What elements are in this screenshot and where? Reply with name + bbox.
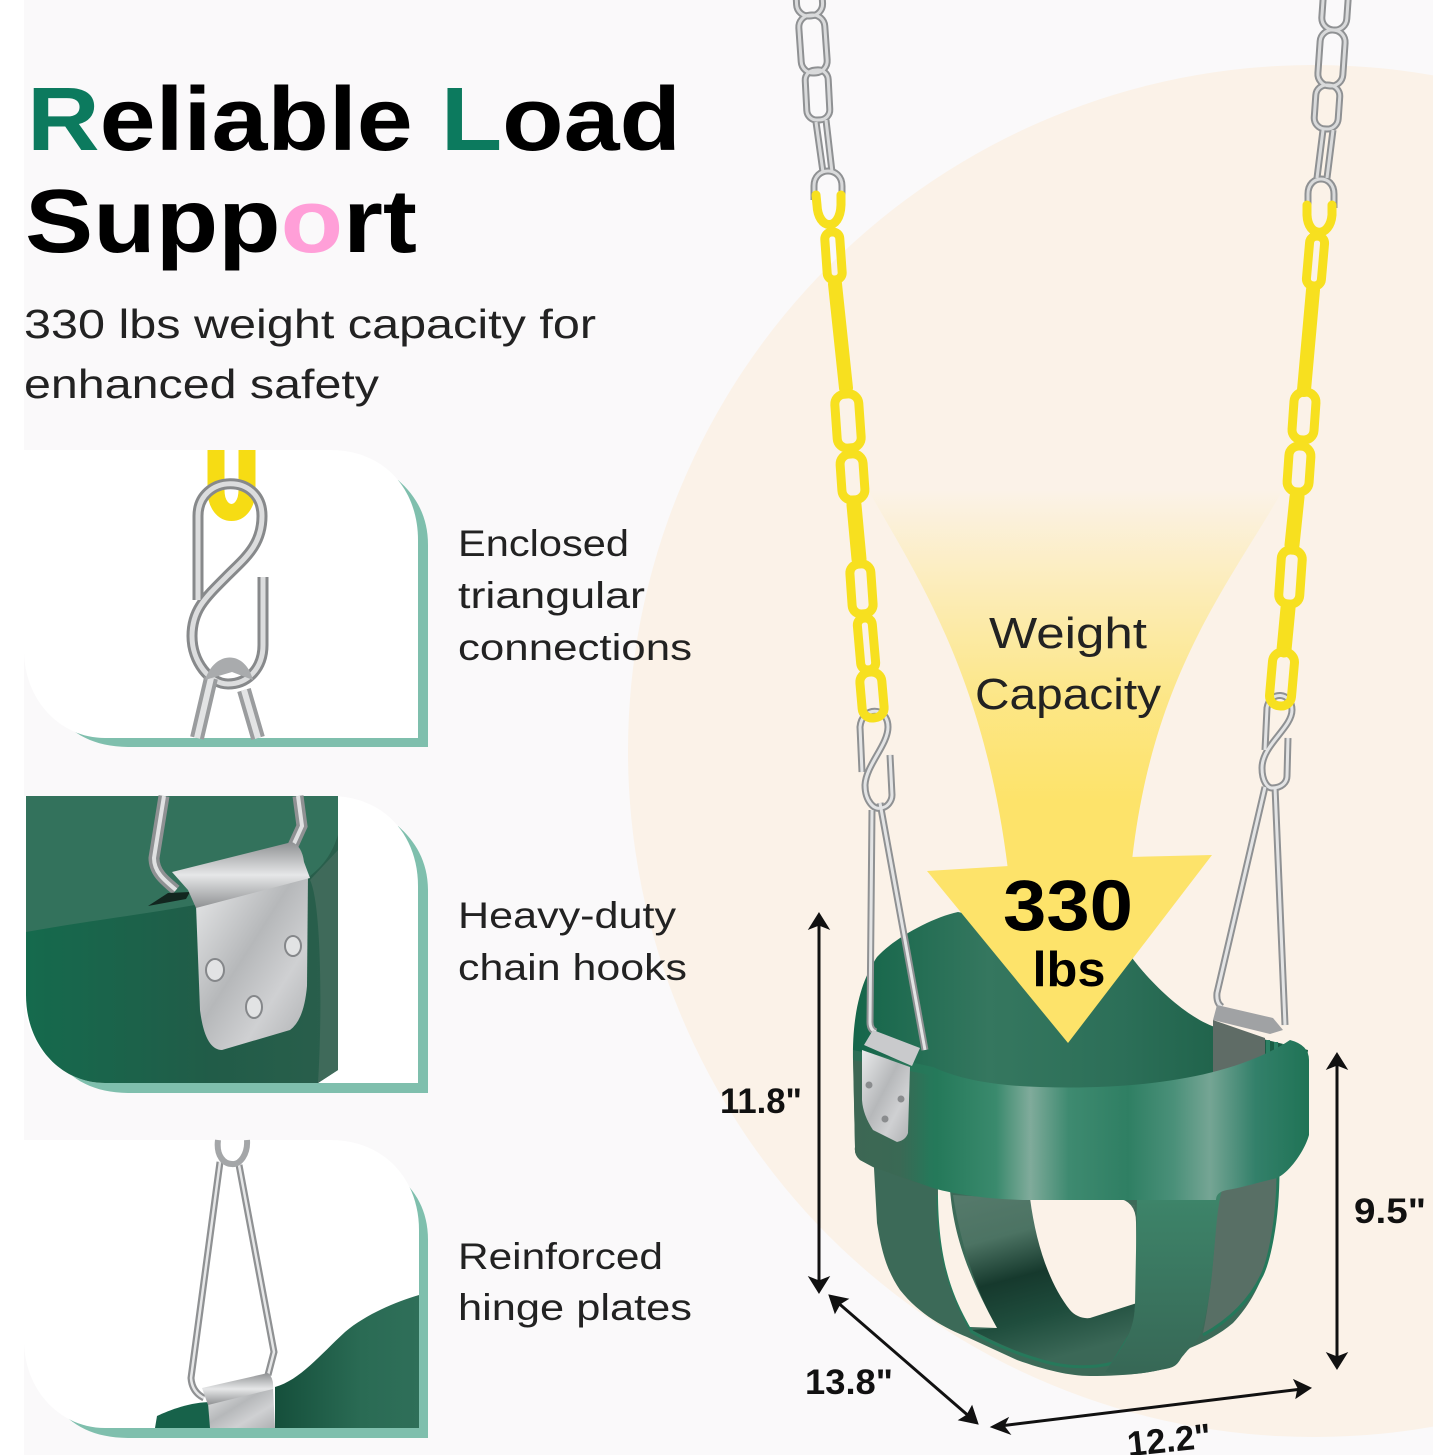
weight capacity label: Weight [989, 609, 1147, 658]
right steel chain [1308, 0, 1350, 208]
subtitle: 330 lbs weight capacity for [24, 301, 596, 347]
front band [853, 1040, 1309, 1200]
height arrow 11.8 [809, 913, 829, 1293]
weight arrow head [927, 855, 1212, 1043]
rivets [866, 1082, 904, 1122]
330 lbs label [1003, 867, 1133, 997]
centre strap [1105, 1190, 1222, 1374]
right yellow chain [1269, 205, 1332, 707]
subtitle: enhanced safety [24, 361, 380, 407]
left hinge roll [864, 1030, 920, 1066]
right rim [1203, 1170, 1278, 1335]
text: triangular connections: connections [458, 627, 692, 668]
slit shadow [148, 892, 190, 906]
text: triangular connections [458, 523, 692, 668]
dimension labels [720, 1082, 1426, 1455]
inner rim [938, 1195, 1133, 1367]
left steel chain [795, 0, 842, 200]
panel: hinge plates [24, 1140, 428, 1438]
dimension arrows [809, 913, 1347, 1434]
330 lbs label: lbs [1032, 943, 1106, 997]
subtitle [24, 301, 596, 407]
title line 1: Reliable Load [27, 70, 681, 170]
text: chain hooks: chain hooks [458, 947, 687, 988]
hinge roll [172, 842, 310, 908]
left hinge plate [862, 1050, 910, 1142]
green seat close-up [275, 1295, 419, 1428]
peach background circle [628, 65, 1455, 1437]
left yellow chain [816, 195, 885, 719]
S hook [192, 484, 263, 684]
text: triangular connections: triangular [458, 575, 645, 616]
lower shell [873, 1150, 1278, 1376]
text: hinge plates: hinge plates [458, 1287, 692, 1328]
right hinge [1213, 1005, 1283, 1034]
dimension labels: 11.8" [720, 1082, 802, 1121]
text: hinge plates: Reinforced [458, 1236, 663, 1277]
width arrow 12.2 [991, 1380, 1311, 1434]
triangle wire [191, 1162, 274, 1398]
seat height arrow 9.5 [1327, 1053, 1347, 1369]
depth arrow 13.8 [829, 1295, 978, 1424]
dimension labels: 13.8" [805, 1363, 893, 1402]
330 lbs label: 330 [1003, 867, 1133, 946]
swing seat back rest [853, 912, 1308, 1110]
yellow load beam [868, 490, 1283, 870]
right wire frame [1217, 695, 1292, 1025]
band dark left end [853, 1060, 930, 1188]
side slit [938, 1185, 997, 1328]
title line 2: Supp ort [25, 172, 417, 272]
text: chain hooks [458, 895, 687, 988]
right white margin [1433, 0, 1455, 1455]
yellow chain link [216, 450, 247, 512]
dimension labels: 9.5" [1354, 1192, 1426, 1231]
title [25, 70, 681, 272]
right green rims [1268, 1040, 1284, 1068]
weight capacity label [975, 609, 1161, 719]
panel: triangular connections [24, 450, 428, 747]
hinge roll [202, 1373, 273, 1405]
inner shell [953, 1195, 1135, 1365]
text: triangular connections: Enclosed [458, 523, 629, 564]
rivets [206, 936, 301, 1018]
right side window [1203, 1170, 1278, 1333]
wire [154, 796, 302, 890]
right inner plate [1213, 1020, 1265, 1075]
swing seat [853, 695, 1309, 1376]
hinge plate [208, 1387, 275, 1428]
panel: chain hooks [24, 796, 428, 1093]
text: hinge plates [458, 1236, 692, 1328]
green seat close-up [26, 796, 338, 1083]
leg hole [1030, 1198, 1137, 1318]
hinge plate [196, 874, 308, 1050]
weight capacity label: Capacity [975, 670, 1161, 719]
triangular wire [197, 658, 258, 738]
text: chain hooks: Heavy-duty [458, 895, 677, 936]
left wire frame [860, 711, 925, 1050]
hook [218, 1140, 247, 1164]
